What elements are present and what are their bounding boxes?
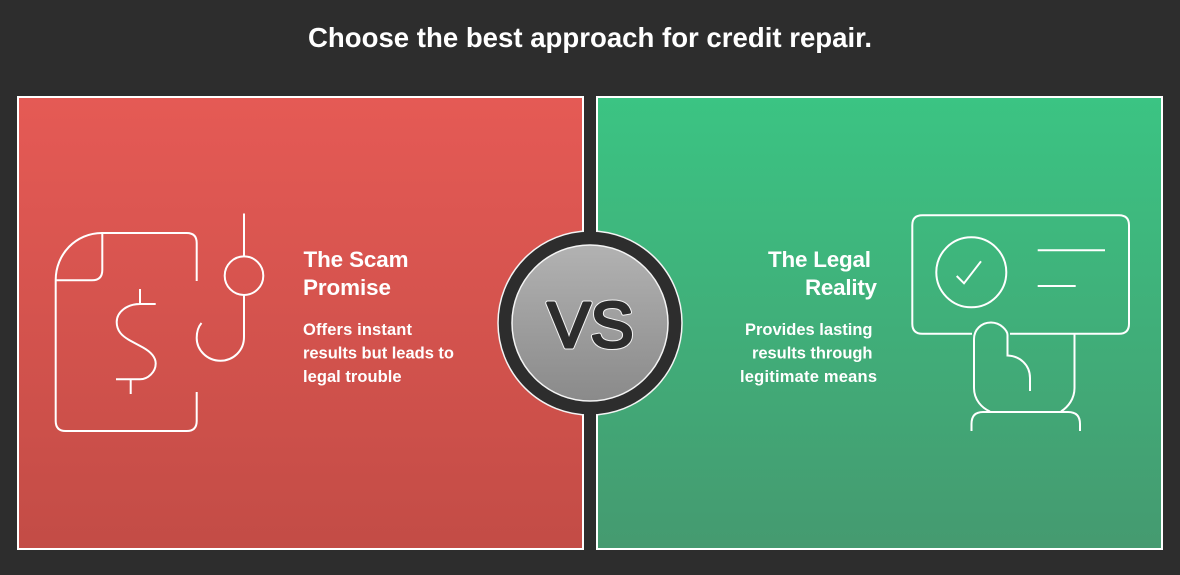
text: scam description: results but leads to bbox=[303, 344, 454, 362]
text: legal description: Provides lasting bbox=[745, 321, 872, 339]
heading: the scam promise: Promise bbox=[303, 275, 391, 300]
icon: hand touching verified screen bbox=[912, 215, 1129, 431]
panel: the legal reality bbox=[597, 97, 1162, 549]
text: legal description: legitimate means bbox=[740, 368, 877, 386]
title: Choose the best approach for credit repair. bbox=[308, 22, 872, 53]
text: scam description: Offers instant bbox=[303, 321, 412, 339]
heading: the legal reality: The Legal bbox=[768, 247, 871, 272]
heading: the scam promise: The Scam bbox=[304, 247, 408, 272]
text: legal description: results through bbox=[752, 344, 872, 362]
vs badge bbox=[498, 226, 682, 420]
vs label fill: VS bbox=[548, 289, 634, 361]
heading: the legal reality: Reality bbox=[805, 275, 878, 300]
vs label: VS bbox=[548, 289, 634, 361]
text: scam description: legal trouble bbox=[303, 368, 402, 386]
center divider bbox=[584, 90, 596, 552]
panel: the scam promise bbox=[18, 97, 583, 549]
icon: document with dollar sign and fish hook bbox=[56, 214, 263, 431]
